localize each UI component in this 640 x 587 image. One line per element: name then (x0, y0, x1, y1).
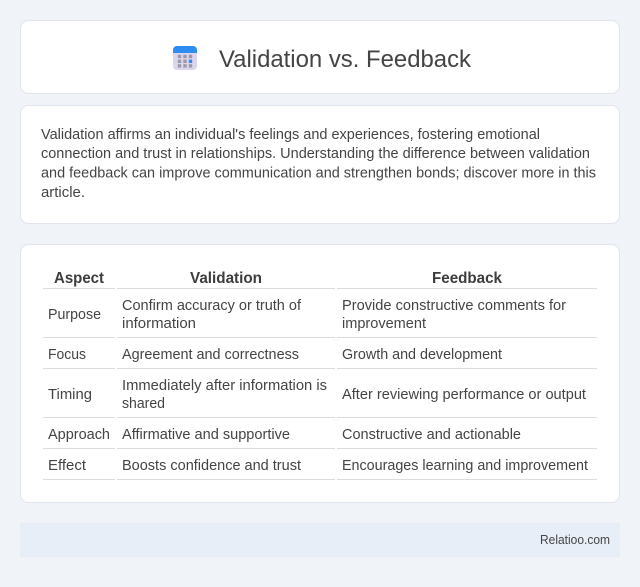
row: timing: shared (122, 396, 165, 412)
row: timing: After reviewing performance or output (342, 387, 586, 403)
panel: introduction (20, 106, 620, 224)
title: Validation vs. Feedback (219, 46, 472, 73)
row: timing: Timing (48, 387, 92, 403)
text block: introduction paragraph: and feedback can improve communication and strengthen bonds; discover more in this (41, 164, 596, 182)
row: purpose: Confirm accuracy or truth of (122, 298, 302, 314)
footer credit: Relatioo.com (540, 533, 610, 547)
row: timing: Immediately after information is (122, 378, 327, 394)
row: approach: Approach (48, 427, 110, 443)
row: timing (48, 378, 586, 412)
row: purpose: information (122, 316, 196, 332)
icon: calendar (173, 46, 197, 70)
text block: introduction paragraph: Validation affirms an individual's feelings and experiences, fostering emotional (41, 126, 540, 143)
text block: introduction paragraph (41, 126, 596, 201)
panel: comparison table (20, 244, 620, 502)
row: purpose: Provide constructive comments for (342, 298, 566, 314)
row: effect: Boosts confidence and trust (122, 458, 301, 474)
row: purpose: Purpose (48, 307, 101, 323)
footer (20, 523, 620, 557)
table header: Feedback (432, 270, 502, 287)
row: approach: Affirmative and supportive (122, 427, 290, 443)
row: effect: Encourages learning and improvement (342, 458, 588, 474)
row: focus: Agreement and correctness (122, 347, 299, 363)
row: focus (48, 347, 502, 363)
row: purpose (48, 298, 566, 332)
row: purpose: improvement (342, 316, 426, 332)
text block: introduction paragraph: connection and trust in relationships. Understanding the difference between validation (41, 145, 590, 162)
table header: Aspect (54, 270, 105, 287)
row: effect: Effect (48, 458, 86, 474)
row: approach: Constructive and actionable (342, 427, 521, 443)
row: focus: Growth and development (342, 347, 502, 363)
text block: introduction paragraph: article. (41, 184, 85, 201)
row: approach (48, 427, 521, 443)
table header: Validation (190, 270, 262, 287)
panel: title card (20, 20, 620, 94)
row: effect (48, 458, 588, 474)
row: focus: Focus (48, 347, 86, 363)
table header (54, 270, 502, 287)
